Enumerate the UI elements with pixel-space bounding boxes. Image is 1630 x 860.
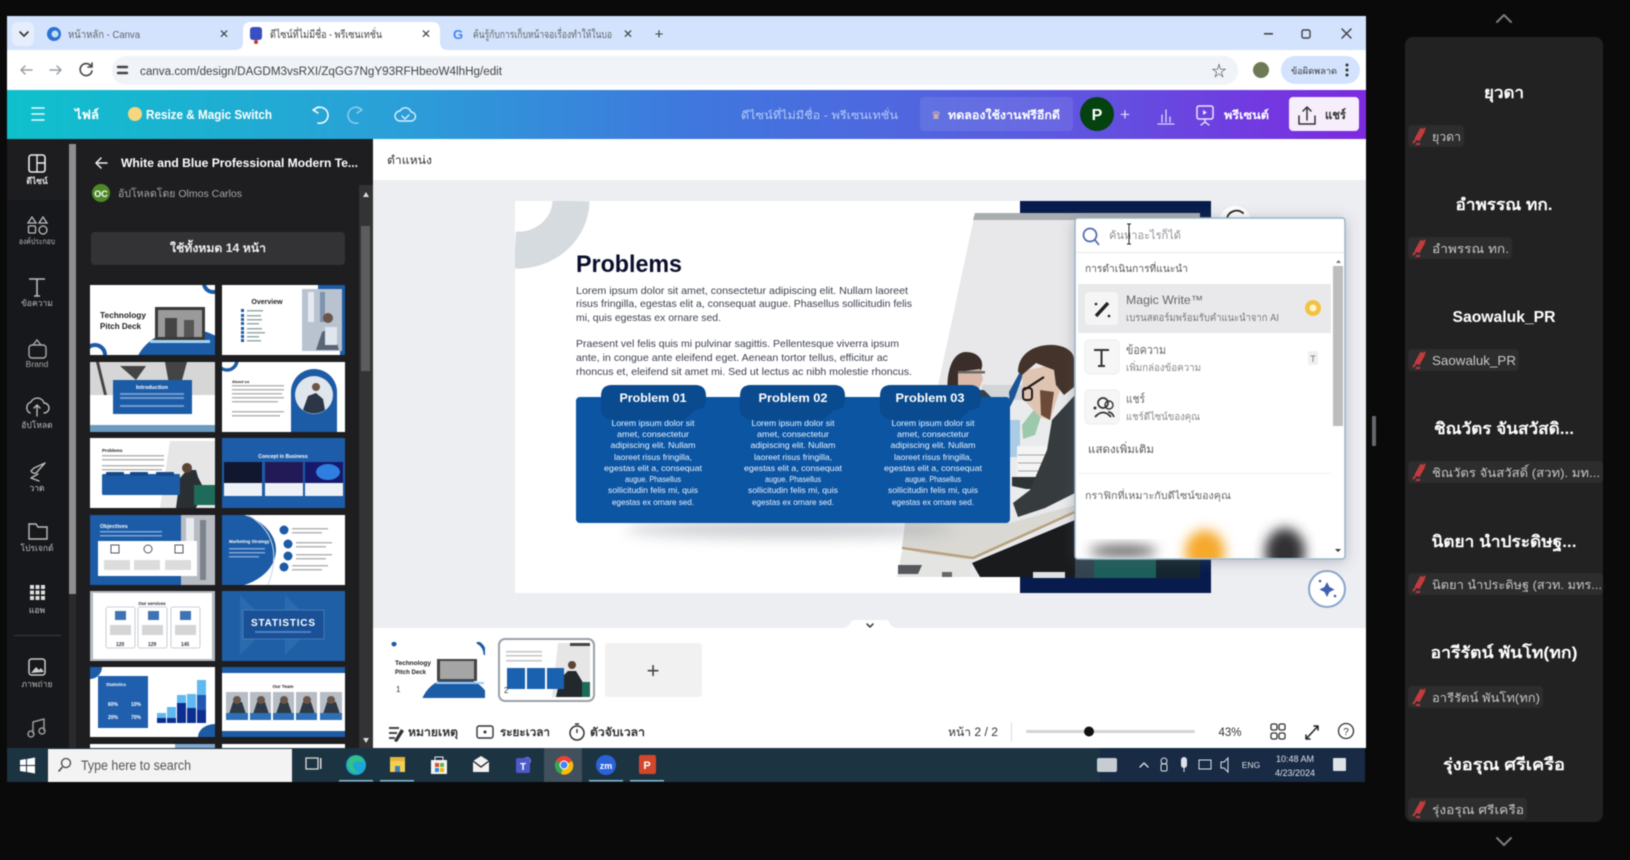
page thumb 1: Technology bbox=[395, 661, 432, 667]
thumb: our services: 129 bbox=[148, 642, 157, 648]
tab: home: หน้าหลัก - Canva bbox=[68, 29, 140, 41]
footer: notes: หมายเหตุ bbox=[408, 727, 458, 740]
problem text 02: egestas elit a, consequat bbox=[744, 463, 843, 473]
command: magic write: Magic Write™ bbox=[1126, 293, 1203, 307]
command: share bbox=[1085, 390, 1200, 424]
system tray: 4/23/2024 bbox=[1275, 768, 1315, 778]
command search popup: แสดงเพิ่มเติม bbox=[1088, 441, 1154, 456]
template panel heading: OC bbox=[94, 189, 108, 199]
search field bbox=[1076, 224, 1344, 253]
template thumbnails bbox=[78, 274, 345, 750]
participant: nittaya: นิตยา นำประดิษฐ... bbox=[1432, 533, 1576, 552]
thumb: introduction bbox=[90, 362, 215, 432]
thumb: marketing strategy bbox=[221, 514, 346, 586]
tab: google: ค้นรู้กับการเก็บหน้าจอเรื่องทำให้ในบอ bbox=[473, 27, 612, 41]
rail: brand: Brand bbox=[26, 359, 49, 369]
slide: problems bbox=[515, 201, 1211, 593]
taskbar apps: T bbox=[520, 762, 526, 773]
start button bbox=[20, 758, 35, 774]
thumb: our services bbox=[90, 591, 215, 661]
thumb: statistics chart: Statistics bbox=[106, 682, 127, 687]
rail: projects: โปรเจกต์ bbox=[20, 543, 54, 553]
rail: draw: วาด bbox=[29, 483, 45, 493]
participant: chinnawat: ชิณวัตร จันสวัสดิ... bbox=[1434, 420, 1574, 438]
tab: home bbox=[47, 27, 229, 41]
panel collapse handle bbox=[373, 414, 384, 470]
problem text 01: sollicitudin felis mi, quis bbox=[608, 485, 698, 495]
template panel heading: ใช้ทั้งหมด 14 หน้า bbox=[170, 239, 266, 255]
tab: active design: ดีไซน์ที่ไม่มีชื่อ - พรีเซนเทชั่น bbox=[270, 27, 382, 41]
participant: saowaluk: Saowaluk_PR bbox=[1452, 309, 1556, 326]
rail: elements bbox=[19, 217, 55, 246]
rail: upload bbox=[21, 398, 53, 430]
footer: timer: ตัวจับเวลา bbox=[590, 726, 645, 739]
thumb: overview bbox=[222, 285, 345, 355]
problem text 02: Lorem ipsum dolor sit bbox=[752, 418, 835, 428]
thumb: objectives bbox=[90, 515, 215, 585]
problem text 01: amet, consectetur bbox=[617, 429, 689, 439]
footer: duration: ระยะเวลา bbox=[500, 727, 550, 739]
thumb: concept in business bbox=[222, 438, 345, 508]
participant: saowaluk: Saowaluk_PR bbox=[1432, 353, 1516, 368]
slide body text: risus fringilla, egestas elit a, consequat augue. Phasellus sollicitudin felis bbox=[576, 298, 912, 310]
share button: แชร์ bbox=[1325, 108, 1347, 122]
papers and laptop in photo bbox=[1008, 372, 1047, 490]
problem text 03: augue. Phasellus bbox=[905, 474, 961, 484]
page thumb 1: Pitch Deck bbox=[395, 670, 427, 676]
command: text: T bbox=[1310, 354, 1316, 364]
left dark editor column bbox=[7, 139, 373, 748]
rail: music bbox=[28, 719, 45, 737]
canva header bar: Resize & Magic Switch bbox=[146, 108, 272, 122]
canva header bar: ดีไซน์ที่ไม่มีชื่อ - พรีเซนเทชั่น bbox=[741, 107, 899, 122]
magic assistant button bbox=[1309, 571, 1345, 607]
problem tab 02 bbox=[740, 385, 845, 420]
command search popup: กราฟิกที่เหมาะกับดีไซน์ของคุณ bbox=[1085, 488, 1231, 502]
problem text 01: egestas elit a, consequat bbox=[604, 463, 703, 473]
thumbs: next row bbox=[90, 744, 345, 748]
canva header bar: ไฟล์ bbox=[73, 107, 99, 122]
browser tab strip bbox=[7, 16, 1366, 50]
thumb: statistics chart: 20% bbox=[108, 715, 119, 721]
thumb: about us bbox=[221, 361, 346, 433]
canva header bar: ทดลองใช้งานฟรีอีกดี bbox=[948, 108, 1060, 122]
participant: arirat: อารีรัตน์ พันโท(ทก) bbox=[1432, 691, 1540, 705]
rail: design bbox=[26, 155, 48, 186]
participant: chinnawat: ชิณวัตร จันสวัสดิ์ (สวท). มท... bbox=[1432, 464, 1600, 480]
slide body text: Praesent vel felis quis mi pulvinar sagittis. Pellentesque viverra ipsum bbox=[576, 338, 899, 350]
problem text 01: adipiscing elit. Nullam bbox=[610, 440, 696, 450]
participant: rungarun: รุ่งอรุณ ศรีเครือ bbox=[1443, 755, 1565, 775]
card shadow bbox=[625, 520, 955, 538]
slide heading: Problems bbox=[576, 251, 682, 278]
thumb: about us: About us bbox=[232, 379, 250, 384]
thumb: our services: 145 bbox=[181, 642, 190, 648]
problem text 03: amet, consectetur bbox=[897, 429, 969, 439]
search box: Type here to search bbox=[81, 758, 191, 773]
scroll down chevron bbox=[1497, 838, 1511, 845]
canvas background bbox=[373, 180, 1366, 628]
participant: arirat: อารีรัตน์ พันโท(ทก) bbox=[1430, 642, 1578, 662]
scroll up chevron bbox=[1497, 15, 1511, 22]
problem text 01: egestas ex ornare sed. bbox=[612, 497, 694, 507]
rail: text bbox=[21, 279, 53, 308]
tab: home: ✕ bbox=[219, 27, 229, 41]
template panel heading: อัปโหลดโดย Olmos Carlos bbox=[118, 187, 242, 200]
desk in photo bbox=[897, 505, 1075, 578]
thumb: technology pitch deck bbox=[89, 284, 216, 356]
tab: google: G bbox=[453, 27, 463, 42]
participant panel bbox=[1405, 15, 1603, 845]
thumb: statistics chart bbox=[89, 666, 216, 738]
footer: notes bbox=[389, 727, 458, 742]
thumb: statistics chart: 60% bbox=[108, 702, 119, 708]
rail: elements: องค์ประกอบ bbox=[19, 236, 55, 246]
rail: upload: อัปโหลด bbox=[21, 420, 53, 430]
thumb: statistics chart: 70% bbox=[131, 715, 142, 721]
thumb: our team bbox=[222, 667, 345, 737]
woman in photo bbox=[946, 351, 992, 398]
page strip bbox=[373, 620, 1366, 748]
search field: ค้นหาอะไรก็ได้ bbox=[1109, 228, 1181, 242]
refresh button behind popup bbox=[1219, 206, 1251, 238]
top context toolbar: ตำแหน่ง bbox=[387, 154, 432, 167]
page thumb 1 bbox=[390, 641, 486, 699]
taskbar apps: P bbox=[643, 760, 651, 772]
participant: yuwada bbox=[1408, 85, 1524, 147]
rail: design: ดีไซน์ bbox=[26, 176, 48, 186]
problem text 03: sollicitudin felis mi, quis bbox=[888, 485, 978, 495]
thumb: our services: Our services bbox=[138, 601, 166, 606]
system tray bbox=[1097, 754, 1346, 778]
thumb: statistics: STATISTICS bbox=[251, 618, 315, 629]
add page button: + bbox=[647, 658, 659, 683]
popup scrollbar bbox=[1333, 260, 1343, 552]
rail: brand bbox=[26, 340, 49, 369]
problem text 01: Lorem ipsum dolor sit bbox=[612, 418, 695, 428]
footer icons: ? bbox=[1343, 727, 1349, 738]
command: share: แชร์ bbox=[1126, 392, 1145, 406]
slide body text: Lorem ipsum dolor sit amet, consectetur adipiscing elit. Nullam laoreet bbox=[576, 285, 908, 297]
thumb: overview: Overview bbox=[251, 299, 283, 306]
rail: projects bbox=[20, 524, 54, 553]
problem tab 02: Problem 02 bbox=[758, 391, 828, 405]
problem text 03: Lorem ipsum dolor sit bbox=[892, 418, 975, 428]
slide ring decoration bbox=[515, 201, 571, 250]
thumb: problems: Problems bbox=[102, 448, 123, 453]
rail: apps bbox=[29, 585, 45, 615]
command search popup: การดำเนินการที่แนะนำ bbox=[1085, 261, 1188, 275]
add page button bbox=[605, 643, 702, 697]
left icon rail bbox=[14, 155, 61, 737]
viewer splitter handle bbox=[1372, 416, 1376, 446]
problem text 03: adipiscing elit. Nullam bbox=[890, 440, 976, 450]
problem text 03 bbox=[884, 418, 983, 507]
problem tab 03: Problem 03 bbox=[896, 391, 965, 405]
participant: amphan bbox=[1408, 196, 1552, 259]
problem text 02: egestas ex ornare sed. bbox=[752, 497, 834, 507]
problem text 02: augue. Phasellus bbox=[765, 474, 821, 484]
canva header bar bbox=[7, 90, 1366, 139]
participant: arirat bbox=[1408, 642, 1578, 708]
command: text bbox=[1085, 340, 1318, 374]
slide body text: ante, in congue ante eleifend eget. Aenean tortor tellus, efficitur ac bbox=[576, 352, 888, 364]
taskbar apps bbox=[306, 748, 664, 782]
participant: rungarun: รุ่งอรุณ ศรีเครือ bbox=[1432, 803, 1524, 818]
problem tab 03 bbox=[880, 385, 981, 420]
footer: page counter: หน้า 2 / 2 bbox=[948, 726, 998, 739]
problem tab 01 bbox=[601, 385, 706, 420]
command search popup bbox=[1075, 218, 1345, 576]
browser address bar: ข้อผิดพลาด bbox=[1291, 66, 1337, 76]
footer tools bbox=[389, 722, 1354, 742]
slide photo bbox=[897, 213, 1200, 578]
problem text 02 bbox=[744, 418, 843, 507]
zoom slider bbox=[1026, 726, 1195, 736]
template panel heading: White and Blue Professional Modern Te... bbox=[121, 156, 358, 170]
search box bbox=[48, 749, 292, 782]
tab: active design bbox=[235, 22, 448, 50]
problem text 03: egestas ex ornare sed. bbox=[892, 497, 974, 507]
thumb: our services: 120 bbox=[116, 642, 125, 648]
thumb: technology pitch deck: Pitch Deck bbox=[100, 322, 142, 331]
problem text 02: amet, consectetur bbox=[757, 429, 829, 439]
problem text 03: laoreet risus fringilla, bbox=[894, 452, 972, 462]
man in photo bbox=[1013, 345, 1075, 517]
participant: saowaluk bbox=[1408, 309, 1556, 371]
thumb: concept in business: Concept in Business bbox=[258, 454, 308, 460]
thumb: statistics chart: 10% bbox=[131, 702, 142, 708]
problem tab 01: Problem 01 bbox=[620, 391, 687, 405]
participant: yuwada: ยุวดา bbox=[1432, 130, 1461, 145]
problem text 02: sollicitudin felis mi, quis bbox=[748, 485, 838, 495]
command: text: ข้อความ bbox=[1126, 343, 1166, 357]
problem text 02: adipiscing elit. Nullam bbox=[750, 440, 836, 450]
browser address bar bbox=[7, 50, 1366, 90]
footer tools: 43% bbox=[1218, 727, 1242, 739]
footer: duration bbox=[477, 726, 550, 739]
slide body text bbox=[576, 285, 912, 378]
rail: text: ข้อความ bbox=[21, 298, 53, 308]
participant: amphan: อำพรรณ ทก. bbox=[1456, 196, 1552, 214]
problem text 01: laoreet risus fringilla, bbox=[614, 452, 692, 462]
thumb: our team: Our Team bbox=[273, 684, 293, 689]
thumb: technology pitch deck: Technology bbox=[100, 311, 147, 320]
footer: timer bbox=[570, 724, 645, 740]
page thumb 1: 1 bbox=[396, 685, 401, 694]
tab: active design: ✕ bbox=[421, 27, 431, 41]
thumb: problems bbox=[90, 438, 215, 508]
suggested graphics bbox=[1089, 528, 1305, 576]
thumb: marketing strategy: Marketing Strategy bbox=[229, 539, 270, 544]
top context toolbar bbox=[373, 139, 1366, 180]
system tray: 10:48 AM bbox=[1276, 754, 1314, 764]
canva header bar: ♛ bbox=[931, 110, 941, 122]
rail: photos: ภาพถ่าย bbox=[22, 679, 52, 689]
problem text 01 bbox=[604, 418, 703, 507]
problem text 03: egestas elit a, consequat bbox=[884, 463, 983, 473]
rail: photos bbox=[22, 659, 52, 689]
rail: apps: แอพ bbox=[29, 605, 45, 615]
page thumb 2 selected: 2 bbox=[504, 686, 509, 695]
share button bbox=[1289, 97, 1359, 131]
windows taskbar bbox=[7, 748, 1365, 782]
template panel heading bbox=[91, 156, 358, 265]
browser address bar: ☆ bbox=[1211, 63, 1227, 80]
canva header bar: P bbox=[1092, 107, 1103, 124]
rail: draw bbox=[29, 463, 45, 493]
browser address bar: canva.com/design/DAGDM3vsRXI/ZqGG7NgY93RFHbeoW4lhHg/edit bbox=[140, 66, 503, 78]
window controls bbox=[1264, 29, 1351, 38]
participant: yuwada: ยุวดา bbox=[1484, 85, 1524, 103]
tab: google: ✕ bbox=[623, 27, 633, 41]
tab: google bbox=[453, 26, 664, 43]
problem cards panel bbox=[576, 385, 1010, 523]
command: text: เพิ่มกล่องข้อความ bbox=[1126, 360, 1201, 374]
command: share: แชร์ดีไซน์ของคุณ bbox=[1126, 411, 1200, 423]
participant: rungarun bbox=[1408, 755, 1565, 820]
canva header bar: + bbox=[1120, 105, 1130, 124]
canva header bar: พรีเซนต์ bbox=[1224, 108, 1269, 122]
slide body text: mi, quis egestas ex ornare sed. bbox=[576, 312, 721, 324]
tab: google: + bbox=[655, 26, 664, 43]
thumb: objectives: Objectives bbox=[100, 524, 128, 530]
system tray: ENG bbox=[1242, 760, 1260, 770]
participant: nittaya bbox=[1408, 533, 1603, 595]
problem text 01: augue. Phasellus bbox=[625, 474, 681, 484]
participant: amphan: อำพรรณ ทก. bbox=[1432, 242, 1509, 256]
slide body text: rhoncus et, eleifend sit amet mi. Sed ut lectus ac nibh molestie rhoncus. bbox=[576, 366, 912, 378]
problem text 02: laoreet risus fringilla, bbox=[754, 452, 832, 462]
command: magic write: เบรนสตอร์มพร้อมรับคำแนะนำจาก AI bbox=[1126, 312, 1279, 324]
command: magic write bbox=[1078, 284, 1331, 333]
participant: chinnawat bbox=[1408, 420, 1603, 483]
page thumb 2 selected bbox=[499, 639, 594, 701]
taskbar apps: zm bbox=[600, 761, 612, 771]
thumb: introduction: Introduction bbox=[136, 385, 169, 391]
participant: nittaya: นิตยา นำประดิษฐ (สวท. มทร... bbox=[1432, 578, 1602, 592]
footer icons bbox=[1271, 724, 1354, 739]
thumb: statistics bbox=[222, 591, 345, 661]
